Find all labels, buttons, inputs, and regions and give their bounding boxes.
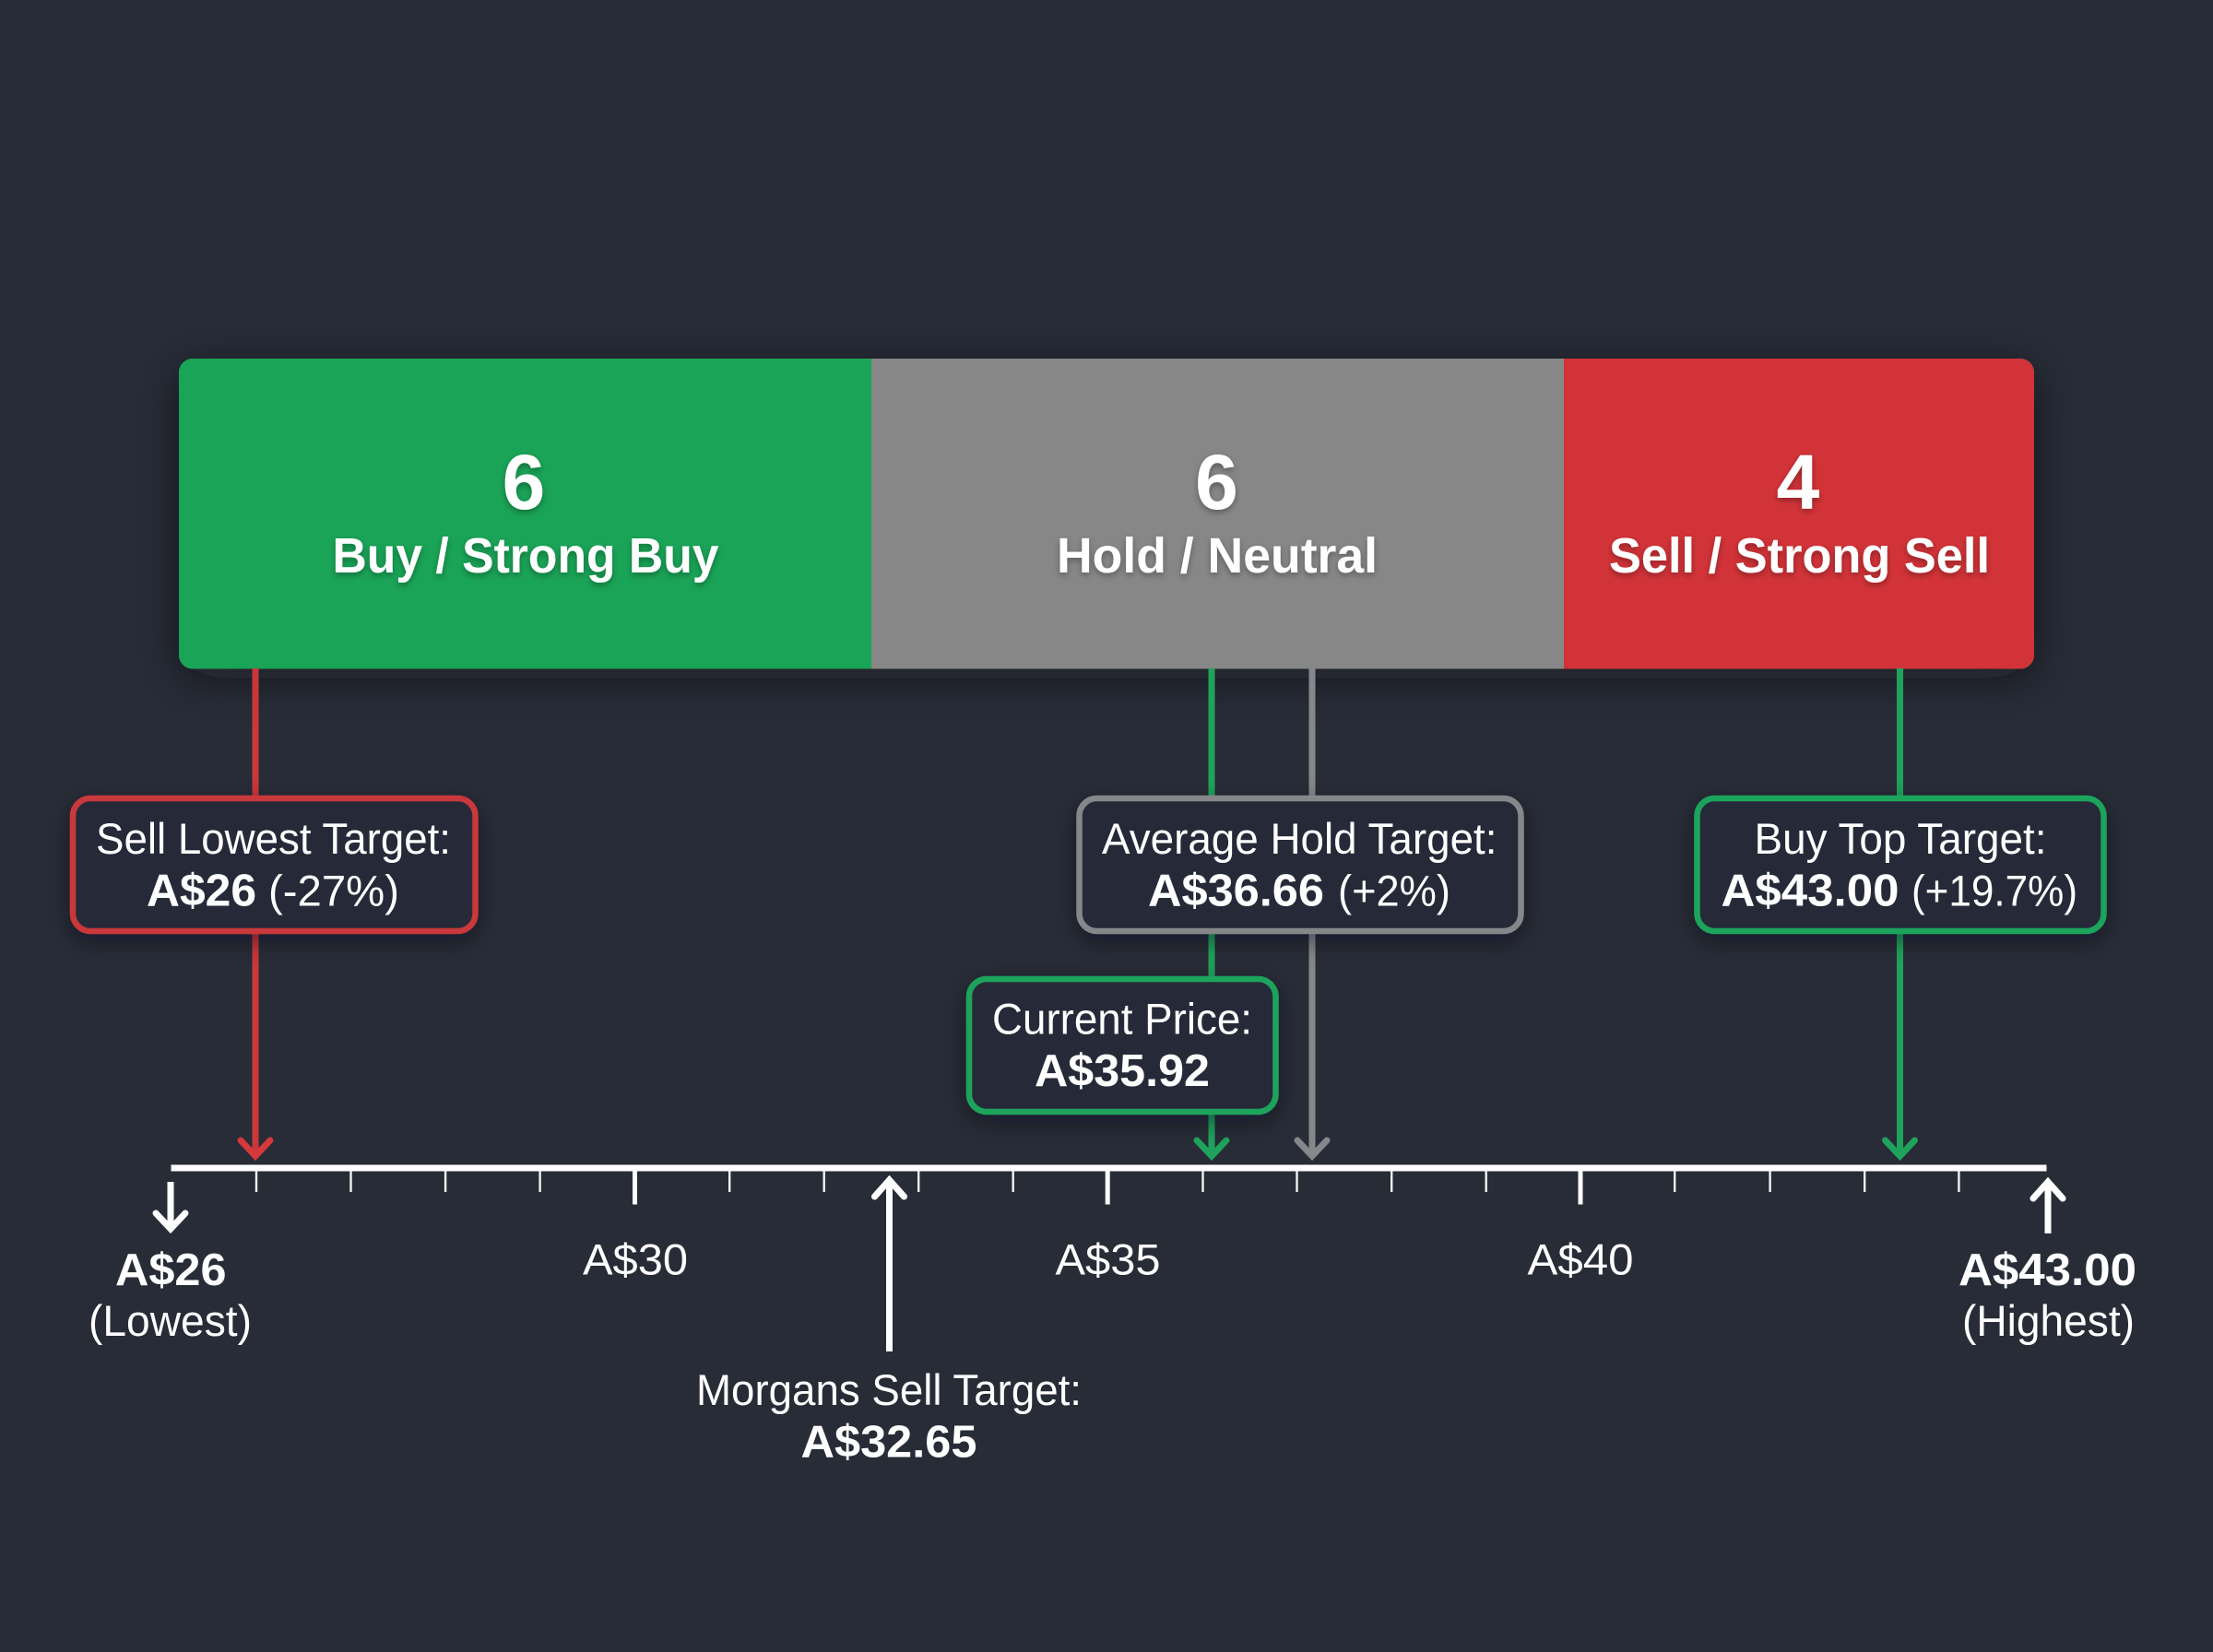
label: morgans sell target [696, 1365, 1082, 1468]
axis label: A$35: A$35 [1055, 1235, 1160, 1283]
buy segment label: Buy / Strong Buy [332, 528, 719, 584]
callout: buy top target: Buy Top Target: [1754, 814, 2047, 863]
callout: average hold target [1079, 798, 1521, 931]
sell segment label: 4 [1777, 439, 1820, 525]
callout: current price: Current Price: [992, 994, 1252, 1044]
arrow: average hold target [1297, 668, 1327, 1156]
callout: buy top target: (+19.7%) [1911, 867, 2077, 914]
label: highest price: A$43.00 [1959, 1245, 2136, 1295]
sell segment label: Sell / Strong Sell [1609, 528, 1990, 584]
hold segment label: Hold / Neutral [1057, 528, 1378, 584]
callout: sell lowest target [73, 798, 476, 931]
label: morgans sell target: Morgans Sell Target: [696, 1365, 1082, 1414]
label: lowest price: (Lowest) [89, 1296, 252, 1345]
callout: sell lowest target: Sell Lowest Target: [96, 814, 451, 863]
hold segment label: 6 [1195, 439, 1238, 525]
callout: current price: A$35.92 [1035, 1046, 1210, 1096]
callout: sell lowest target: A$26 [147, 867, 256, 916]
callout: buy top target [1697, 798, 2104, 931]
label: lowest price: A$26 [115, 1245, 227, 1295]
sell segment label [1609, 439, 1990, 584]
arrow: sell lowest target [241, 668, 270, 1156]
label: lowest price [89, 1245, 252, 1345]
label: highest price: (Highest) [1962, 1296, 2135, 1345]
price axis [172, 1165, 2047, 1204]
axis label: A$40: A$40 [1527, 1235, 1634, 1283]
callout: buy top target: A$43.00 [1721, 867, 1899, 916]
arrow: morgans sell target [874, 1180, 904, 1351]
callout: average hold target: Average Hold Target: [1102, 814, 1497, 863]
label: morgans sell target: A$32.65 [800, 1418, 977, 1468]
callout: average hold target: (+2%) [1338, 867, 1450, 914]
callout: sell lowest target: (-27%) [268, 867, 399, 914]
panel: ratings bar [179, 359, 2034, 669]
axis label: A$30: A$30 [583, 1235, 688, 1283]
arrow: current price [1197, 668, 1226, 1156]
hold segment label [1057, 439, 1378, 584]
arrow: axis highest [2033, 1182, 2063, 1233]
buy segment label: 6 [503, 439, 545, 525]
callout: average hold target: A$36.66 [1148, 867, 1324, 916]
buy segment label [332, 439, 719, 584]
arrow: buy top target [1885, 668, 1914, 1156]
callout: current price [969, 979, 1276, 1112]
label: highest price [1959, 1245, 2136, 1345]
arrow: axis lowest [156, 1182, 185, 1229]
